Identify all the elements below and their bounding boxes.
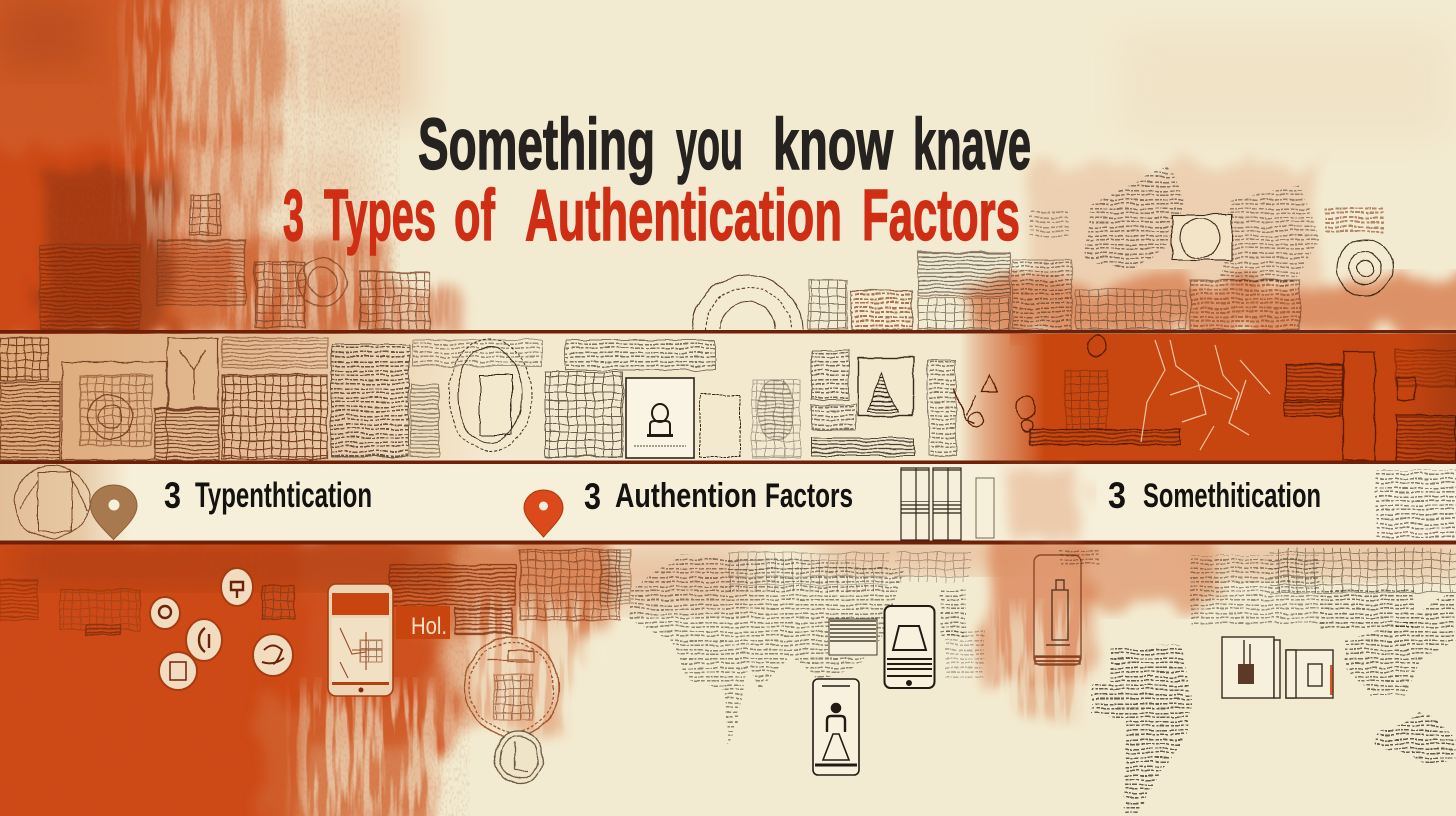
title line 2: Factors	[862, 176, 1020, 256]
label: first band text: Typenthtication	[195, 476, 372, 515]
label: third band text	[1108, 475, 1321, 516]
title line 1: Something	[418, 105, 655, 185]
map: australia cluster	[1373, 712, 1456, 765]
bottom-left orange paint wash	[0, 530, 750, 816]
label: second band text: 3	[584, 476, 601, 517]
white cracks on orange	[1141, 340, 1270, 450]
right sketch over orange	[953, 335, 1456, 461]
title line 2: 3	[283, 176, 304, 256]
sketch: upper-right world map cluster	[1030, 165, 1393, 296]
title line 2	[283, 176, 1020, 256]
label: second band text	[584, 476, 853, 517]
icon: person card	[626, 378, 694, 458]
icon: framed boxes with plug	[1222, 637, 1333, 698]
icon: oval sketch emblem	[465, 637, 559, 737]
icon: round emblems	[150, 568, 293, 690]
paper grain over the painted areas	[0, 0, 470, 816]
label: third band text: Somethitication	[1143, 477, 1321, 515]
sketch: left band emblem	[14, 466, 90, 538]
title	[283, 105, 1031, 256]
icon: phone with trapezoid	[884, 606, 934, 688]
map: southeast asia cluster	[1345, 590, 1456, 695]
label: first band text	[164, 475, 372, 516]
top-right faint orange wash	[970, 30, 1456, 335]
title line 2: Authentication	[525, 176, 842, 256]
icon: striped panel	[829, 619, 877, 655]
sketch: lower-left faint plans on orange	[0, 550, 630, 635]
label: second band text: Factors	[765, 477, 853, 515]
label: sign text block: Hol.	[411, 613, 447, 640]
title line 1: you	[676, 105, 743, 185]
map: south america cluster	[1092, 645, 1192, 813]
sketch: striped panels	[901, 468, 994, 540]
label: second band text: Authention	[615, 477, 757, 515]
band rules	[0, 330, 1456, 544]
title line 1	[418, 105, 1031, 185]
bottom-right orange paint wash	[820, 535, 1456, 730]
map: upper-right machinery cluster	[1060, 548, 1456, 630]
centre sketch panels	[331, 339, 956, 458]
top-left orange paint wash	[0, 0, 460, 340]
sketch: upper-left line art	[40, 195, 430, 330]
title line 2: of	[454, 176, 496, 256]
icon: phone on orange wash	[1034, 555, 1081, 665]
sketch: right band building	[1376, 470, 1456, 538]
icon: small pendant circle	[495, 731, 543, 783]
left sketch panels	[0, 338, 327, 460]
panel: cream label band	[0, 464, 1456, 540]
title line 1: know	[773, 105, 894, 185]
icon: brown map pin	[90, 485, 137, 540]
sketch: upper-centre buildings	[693, 252, 1300, 330]
label: first band text: 3	[164, 475, 181, 516]
panel: middle sketch band	[0, 334, 1456, 461]
icon: orange smartphone with plan	[328, 584, 393, 696]
label: third band text: 3	[1108, 475, 1126, 516]
map: central continent cluster	[631, 552, 984, 745]
icon: phone with person	[813, 679, 859, 775]
title line 2: Types	[324, 176, 436, 256]
label: sign text block	[396, 606, 450, 640]
icon: orange map pin	[524, 490, 563, 537]
title line 1: knave	[913, 105, 1031, 185]
